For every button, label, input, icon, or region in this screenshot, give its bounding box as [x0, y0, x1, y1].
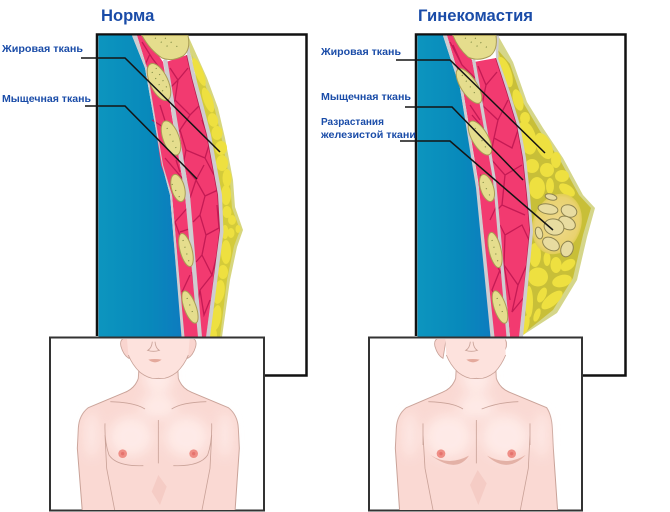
- frame: gynecomastia section: [416, 34, 626, 376]
- skin highlights: [404, 363, 548, 458]
- muscle layer: inner: [447, 36, 508, 337]
- body: [77, 367, 239, 512]
- illustration: normal male torso: [77, 335, 239, 512]
- panel: normal cross-section: [81, 34, 306, 376]
- blue chest wall: [418, 36, 492, 337]
- frame: normal torso: [50, 338, 264, 510]
- leader: glandular growth: [400, 141, 553, 230]
- fat lobules: gynecomastia: [451, 36, 511, 325]
- leader: muscle tissue: [405, 107, 523, 180]
- muscle layer: outer: [474, 58, 530, 337]
- blue chest wall: [98, 36, 182, 337]
- muscle layer: outer: [166, 55, 220, 337]
- glandular tissue growth: [524, 187, 590, 261]
- fat lobules: normal: [142, 36, 201, 325]
- ears: [121, 338, 196, 358]
- gray fascia bands: [132, 36, 224, 337]
- leader: fat tissue: [81, 58, 220, 152]
- panel: gynecomastia torso: [369, 335, 582, 512]
- panel: normal torso: [50, 335, 264, 512]
- fat layer: normal: [185, 36, 243, 343]
- ears: [435, 338, 507, 358]
- face: [127, 339, 190, 378]
- label: fat tissue: Жировая ткань: [1, 44, 83, 55]
- title: Гинекомастия: Гинекомастия: [418, 6, 533, 25]
- frame: normal section: [97, 34, 306, 376]
- panel: gynecomastia cross-section: [396, 34, 626, 376]
- gray fascia bands: [443, 36, 533, 337]
- skin highlights: [86, 363, 231, 458]
- frame: gynecomastia torso: [369, 338, 582, 510]
- label: muscle tissue: Мыщечная ткань: [321, 92, 411, 103]
- illustration: male torso with enlarged breasts: [395, 335, 558, 512]
- label: fat tissue: Жировая ткань: [320, 47, 401, 58]
- muscle layer: inner: [137, 36, 200, 337]
- body: [395, 367, 558, 512]
- label: muscle tissue: Мыщечная ткань: [2, 94, 91, 105]
- enlarged fat layer: [494, 36, 595, 337]
- leader: muscle tissue: [85, 106, 197, 179]
- label: glandular growth: Разрастания: [321, 117, 384, 128]
- leader: fat tissue: [396, 60, 545, 153]
- label: glandular growth: железистой ткани: [320, 130, 416, 141]
- title: Норма: Норма: [101, 6, 155, 25]
- face: [446, 339, 506, 378]
